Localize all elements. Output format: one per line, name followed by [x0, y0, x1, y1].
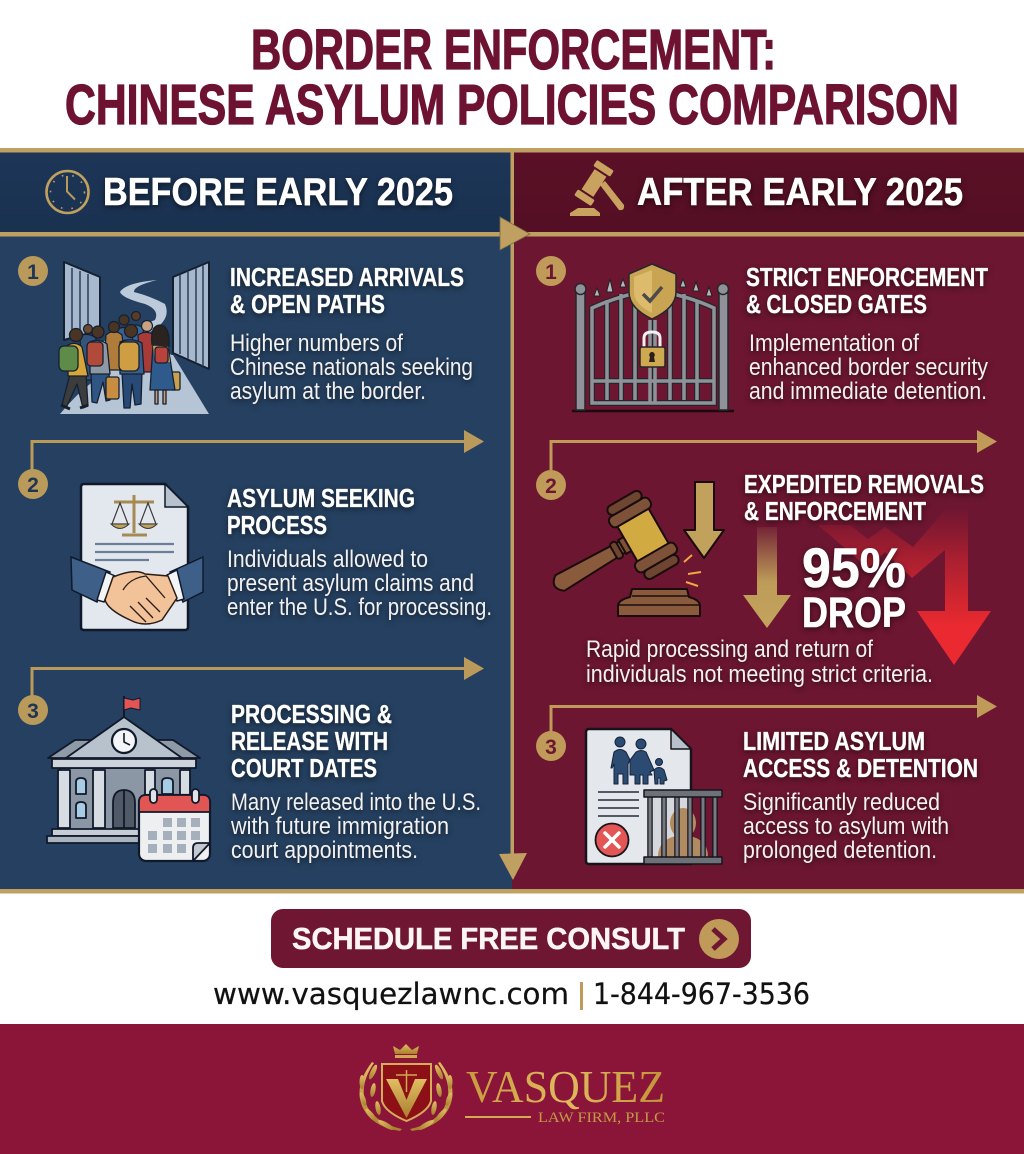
- footer band: [0, 1024, 1024, 1154]
- arrow connector 3: [551, 706, 980, 733]
- badge 2: [18, 469, 48, 499]
- heading: before early 2025: BEFORE EARLY 2025: [103, 171, 453, 214]
- icon: clock: [46, 171, 88, 213]
- step 2 text: Rapid processing and return of: [586, 636, 873, 663]
- badge 2: 2: [545, 475, 557, 498]
- step 1 text: & CLOSED GATES: [746, 289, 927, 319]
- panel header: before: [0, 152, 512, 232]
- person with red backpack: [87, 326, 110, 403]
- step 2 text: enter the U.S. for processing.: [227, 594, 492, 621]
- padlock: [644, 332, 660, 348]
- arrowhead 2: [464, 430, 484, 453]
- badge 1: 1: [27, 261, 39, 284]
- icon: locked gate with shield: [572, 264, 734, 411]
- statistic: 95% drop: [802, 536, 906, 637]
- arrow connector 3: [32, 668, 466, 698]
- title: [65, 18, 959, 137]
- icon: courthouse with calendar: [47, 696, 210, 861]
- icon: header gavel: [570, 160, 624, 216]
- arrow connector 2: [551, 442, 980, 470]
- icon: open gates with crowd: [59, 262, 209, 414]
- gold frame lines and central arrows: [0, 148, 1024, 894]
- person with blue skirt: [150, 325, 180, 404]
- step 3 text: [743, 726, 978, 864]
- step 1 text: Higher numbers of: [230, 330, 403, 357]
- step 1 text: [746, 262, 988, 405]
- step 3 text: COURT DATES: [231, 753, 377, 783]
- badge 3: [18, 695, 48, 725]
- badge 3: 3: [545, 736, 557, 759]
- step 3 text: Many released into the U.S.: [231, 789, 481, 816]
- step 3 text: court appointments.: [231, 837, 418, 864]
- icon: document with family and cage: [586, 729, 722, 864]
- step 1 text: [230, 262, 473, 405]
- big gold arrow: [743, 527, 791, 628]
- statistic: 95% drop: DROP: [802, 589, 906, 637]
- panel: after early 2025: [512, 148, 1024, 893]
- arrowhead 2: [977, 430, 997, 453]
- step 2 text: & ENFORCEMENT: [744, 496, 926, 526]
- person with green backpack: [59, 328, 88, 409]
- panel header: after: [512, 152, 1024, 232]
- step 1 text: & OPEN PATHS: [230, 289, 385, 319]
- contact line: [213, 977, 810, 1011]
- cage with detained person: [644, 790, 722, 864]
- step 1: increased arrivals: [18, 256, 473, 414]
- step 3 text: PROCESSING &: [231, 699, 392, 729]
- arrow connector 2: [32, 442, 466, 470]
- step 2 text: [586, 469, 984, 688]
- contact line: www.vasquezlawnc.com: [213, 977, 569, 1011]
- call to action button: SCHEDULE FREE CONSULT: [292, 921, 685, 956]
- step 3: processing and release: [18, 657, 484, 864]
- step 2 text: ASYLUM SEEKING: [227, 483, 415, 513]
- step 3 text: prolonged detention.: [743, 837, 937, 864]
- badge 1: 1: [545, 261, 557, 284]
- statistic: 95% drop: 95%: [802, 536, 906, 599]
- badge 2: 2: [27, 474, 39, 497]
- badge 1: [18, 256, 48, 286]
- calendar: [139, 789, 210, 861]
- small gold arrow: [684, 482, 724, 558]
- step 3 text: Significantly reduced: [743, 789, 940, 816]
- step 1 text: asylum at the border.: [230, 378, 426, 405]
- step 1 text: INCREASED ARRIVALS: [230, 262, 464, 292]
- contact line: 1-844-967-3536: [593, 977, 810, 1011]
- badge 2: [536, 470, 566, 500]
- step 2: asylum seeking process: [18, 430, 492, 630]
- red zigzag arrow: [818, 510, 991, 665]
- arrowhead 3: [977, 695, 997, 718]
- step 1: strict enforcement: [536, 256, 988, 411]
- shield: [629, 264, 676, 319]
- badge 3: [536, 731, 566, 761]
- step 3 text: LIMITED ASYLUM: [743, 726, 925, 756]
- step 1 text: and immediate detention.: [749, 378, 987, 405]
- step 1 text: Chinese nationals seeking: [230, 354, 473, 381]
- step 1 text: Implementation of: [749, 330, 919, 357]
- badge 3: 3: [27, 700, 39, 723]
- heading: after early 2025: AFTER EARLY 2025: [637, 171, 963, 214]
- back row of people: [80, 312, 155, 380]
- step 3: limited asylum: [536, 695, 997, 864]
- step 2 text: [227, 483, 492, 621]
- call to action button: [271, 909, 751, 968]
- step 3 text: with future immigration: [230, 813, 449, 840]
- logo wordmark: VASQUEZ: [466, 1061, 665, 1112]
- panel: before early 2025: [0, 148, 512, 893]
- step 3 text: [230, 699, 481, 864]
- icon: chevron circle: [699, 919, 739, 959]
- logo crest: [358, 1044, 454, 1132]
- step 1 text: enhanced border security: [749, 354, 988, 381]
- step 3 text: RELEASE WITH: [231, 726, 388, 756]
- step 2 text: individuals not meeting strict criteria.: [586, 661, 933, 688]
- step 2: expedited removals: [534, 430, 997, 688]
- icon: gavel striking block: [534, 482, 724, 622]
- arrowhead 3: [464, 657, 484, 680]
- step 2 text: present asylum claims and: [227, 570, 474, 597]
- logo: vasquez law firm: [358, 1044, 665, 1132]
- step 2 text: PROCESS: [227, 510, 327, 540]
- icon: document with handshake: [71, 484, 203, 630]
- step 2 text: Individuals allowed to: [227, 546, 428, 573]
- badge 1: [536, 256, 566, 286]
- person with tan backpack: [106, 324, 144, 408]
- step 3 text: access to asylum with: [743, 813, 949, 840]
- logo wordmark: LAW FIRM, PLLC: [538, 1110, 665, 1126]
- title: BORDER ENFORCEMENT:: [251, 18, 776, 82]
